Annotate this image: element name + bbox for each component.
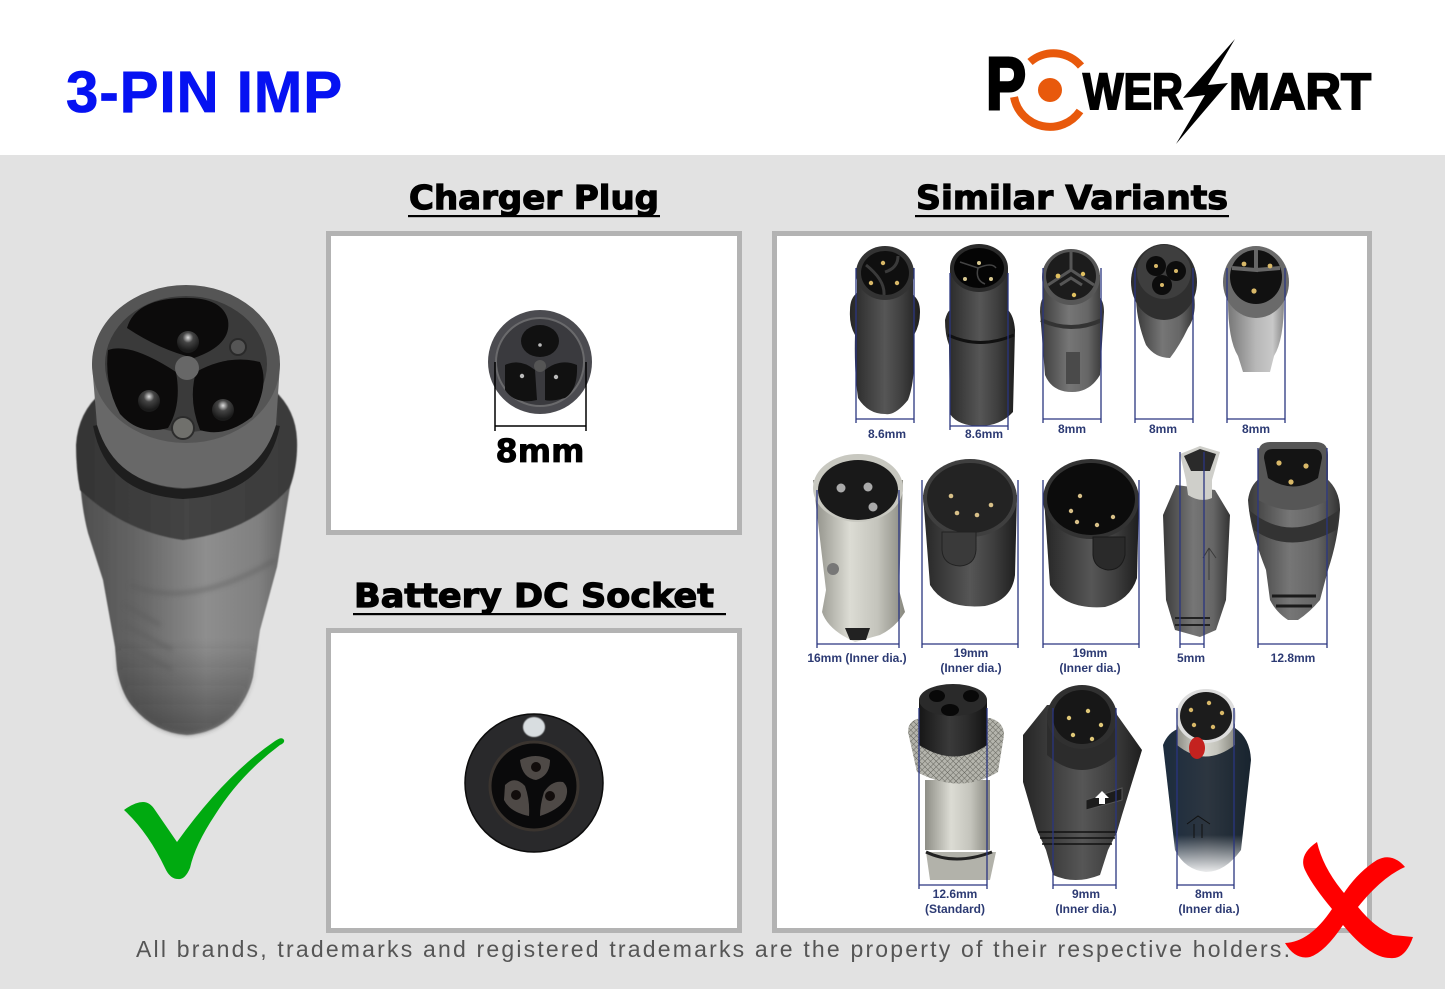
key dimple bottom [172, 417, 194, 439]
header band [0, 0, 1445, 155]
title: 3-PIN IMP [66, 60, 342, 125]
socket holes [504, 756, 567, 816]
white paint mark [523, 717, 545, 737]
neck groove [98, 425, 275, 494]
plug hub [534, 360, 546, 372]
plug pins [520, 343, 558, 379]
variant 12: 9mm [1023, 685, 1142, 916]
variant 13: 8mm: (Inner dia.) [1178, 902, 1240, 916]
variant 6: 16mm silver XLR: 16mm (Inner dia.) [807, 651, 907, 665]
variant 8: 19mm [1043, 459, 1139, 675]
variant 6: 16mm silver XLR [807, 454, 907, 665]
heading text: Charger Plug [409, 178, 659, 217]
green check mark [124, 738, 284, 879]
shoulder band [76, 390, 297, 540]
panel frame [328, 234, 740, 532]
dimension label: 8mm [496, 432, 584, 470]
variant 3: 8mm: 8mm [1058, 422, 1086, 436]
variant 5: 8mm: 8mm [1242, 422, 1270, 436]
variant 10: 12.8mm [1248, 442, 1340, 665]
logo letters MART: MART [1229, 63, 1371, 120]
variant 9: 5mm [1163, 446, 1230, 665]
logo: PowerSmart [986, 39, 1371, 144]
pin 2 [138, 390, 160, 412]
logo letters WER: WER [1083, 63, 1183, 120]
panel: similar variants [774, 234, 1370, 930]
variant 13: 8mm: 8mm [1195, 887, 1223, 901]
heading underline [915, 215, 1229, 217]
variant 7: 19mm [922, 459, 1018, 675]
variant 7: 19mm: (Inner dia.) [940, 661, 1002, 675]
variant 11: 12.6mm: (Standard) [925, 902, 985, 916]
main connector photo [76, 285, 297, 735]
variant 11: 12.6mm: 12.6mm [933, 887, 977, 901]
key dimple top right [230, 339, 246, 355]
variant 2: 8.6mm: 8.6mm [965, 427, 1003, 441]
heading underline [353, 613, 726, 615]
variant 4: 8mm [1131, 244, 1197, 436]
logo orange dot [1038, 78, 1062, 102]
logo lightning bolt [1176, 39, 1235, 144]
panel: battery socket [328, 630, 740, 930]
socket contact holes [511, 762, 555, 801]
logo orange ring [1014, 53, 1081, 127]
logo letter P: P [986, 42, 1026, 125]
body lower shading [115, 640, 258, 735]
connector neck [92, 364, 280, 488]
heading underline [408, 215, 660, 217]
heading text: Similar Variants [916, 178, 1228, 217]
variant 3: 8mm [1040, 249, 1104, 436]
socket well [490, 742, 578, 830]
pin 3 [212, 399, 234, 421]
connector body [80, 480, 290, 735]
hub [175, 356, 199, 380]
variant 7: 19mm: 19mm [954, 646, 988, 660]
variant 11: 12.6mm [908, 684, 1004, 916]
variant 8: 19mm: (Inner dia.) [1059, 661, 1121, 675]
pin 1 [177, 331, 199, 353]
variant 1: 8.6mm: 8.6mm [868, 427, 906, 441]
outer face [92, 285, 280, 443]
variant 2: 8.6mm [945, 244, 1015, 441]
plug face [488, 310, 592, 414]
variant 9: 5mm: 5mm [1177, 651, 1205, 665]
variant 10: 12.8mm: 12.8mm [1271, 651, 1315, 665]
cavity lobes [107, 298, 264, 432]
inner face [105, 296, 267, 432]
plug cavities [505, 325, 577, 401]
panel: charger plug [328, 234, 740, 532]
footer disclaimer: All brands, trademarks and registered trademarks are the property of their respective holders. [136, 936, 1290, 962]
variant 12: 9mm: (Inner dia.) [1055, 902, 1117, 916]
variant 1: 8.6mm [850, 246, 920, 441]
variant 8: 19mm: 19mm [1073, 646, 1107, 660]
variant 12: 9mm: 9mm [1072, 887, 1100, 901]
panel frame [774, 234, 1370, 930]
variant 13: 8mm [1163, 689, 1251, 916]
red cross [1285, 842, 1413, 958]
variant 5: 8mm [1223, 246, 1289, 436]
variant 4: 8mm: 8mm [1149, 422, 1177, 436]
dimension bracket [495, 362, 586, 431]
panel frame [328, 630, 740, 930]
plug inner ring [496, 318, 584, 406]
heading text: Battery DC Socket [354, 576, 714, 615]
body ridges [125, 560, 275, 670]
socket face [465, 714, 603, 852]
